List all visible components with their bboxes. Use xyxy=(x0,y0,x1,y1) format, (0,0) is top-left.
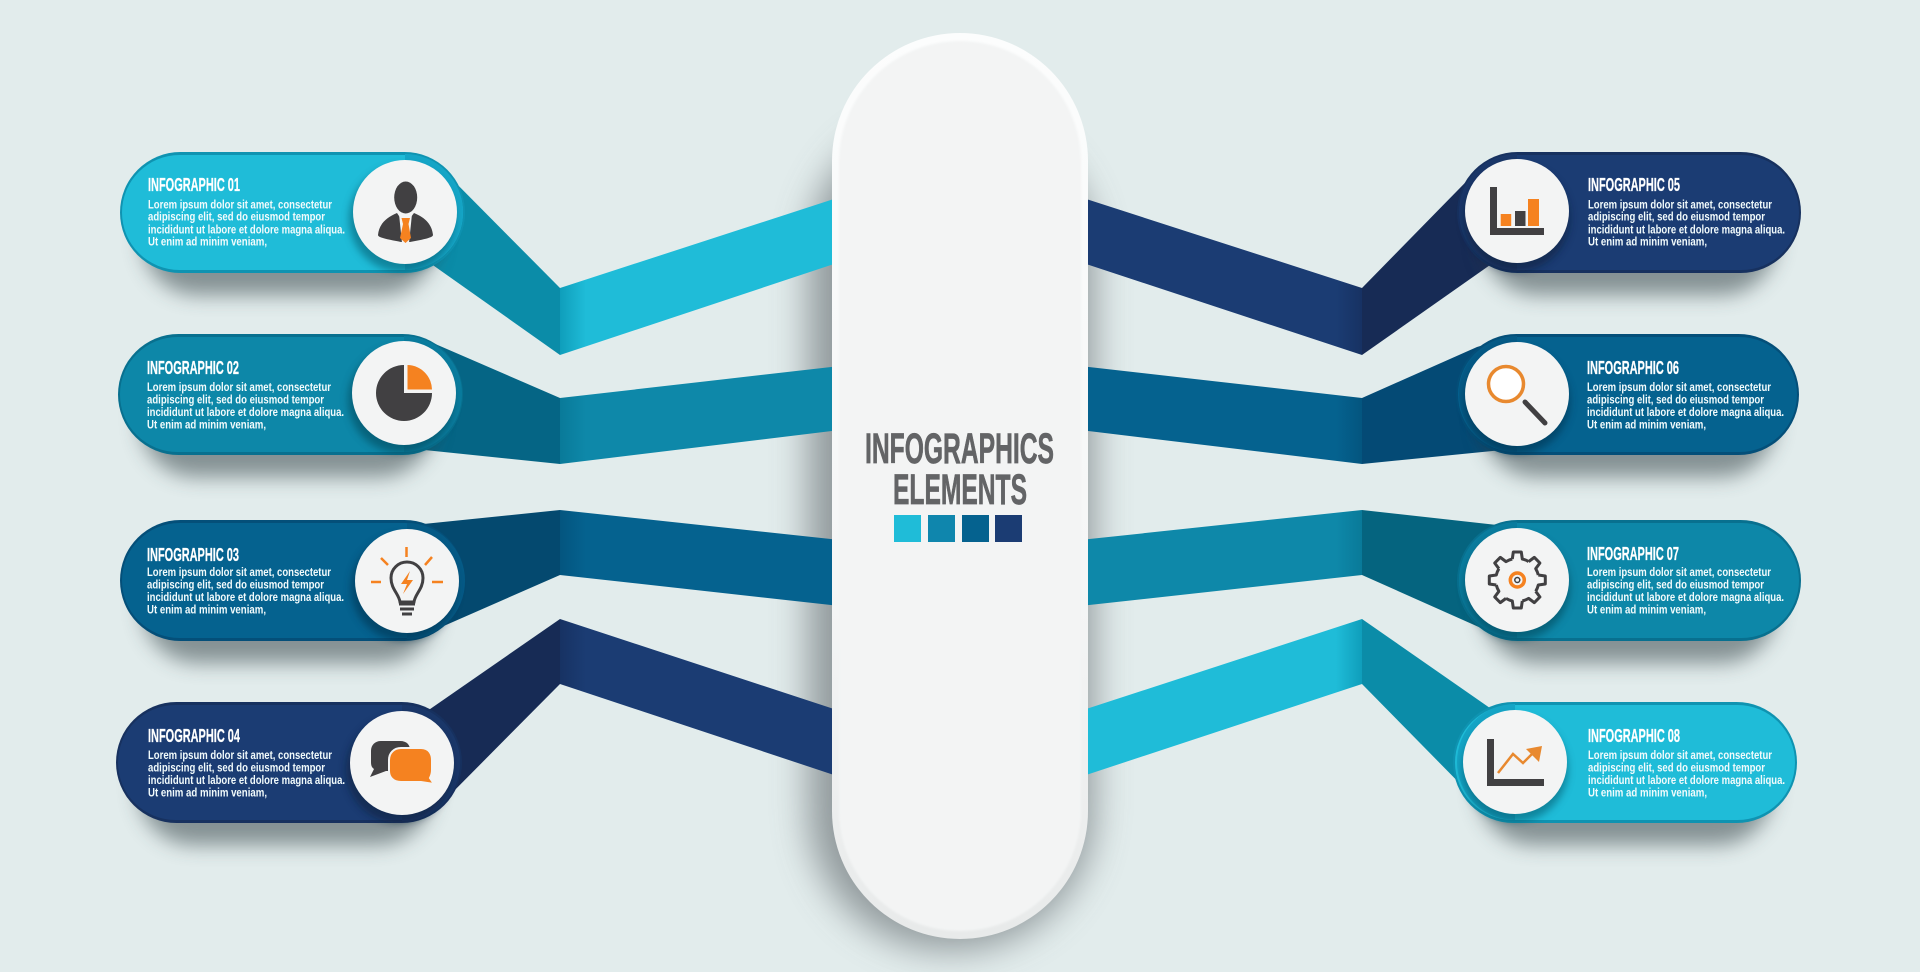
body text 05: Lorem ipsum dolor sit amet, consectetur xyxy=(1588,199,1772,211)
central title: INFOGRAPHICS xyxy=(865,426,1054,473)
body text 06: Lorem ipsum dolor sit amet, consectetur xyxy=(1587,382,1771,394)
body text 01: Ut enim ad minim veniam, xyxy=(148,237,267,249)
body text 04 xyxy=(148,750,345,800)
central title xyxy=(865,426,1054,514)
heading 07: INFOGRAPHIC 07 xyxy=(1587,544,1679,564)
icon: growth chart xyxy=(1487,739,1544,786)
body text 02 xyxy=(147,382,344,432)
body text 06: Ut enim ad minim veniam, xyxy=(1587,420,1706,432)
ribbon 08 xyxy=(1080,619,1515,802)
body text 07: Lorem ipsum dolor sit amet, consectetur xyxy=(1587,567,1771,579)
heading 02: INFOGRAPHIC 02 xyxy=(147,358,239,378)
ribbon 02 xyxy=(404,343,840,464)
heading 04: INFOGRAPHIC 04 xyxy=(148,726,240,746)
colour swatches xyxy=(894,515,1022,542)
panel: infographic 02 xyxy=(118,334,463,477)
icon: bar chart xyxy=(1490,187,1544,235)
body text 07: Ut enim ad minim veniam, xyxy=(1587,604,1706,616)
body text 06 xyxy=(1587,382,1784,432)
panel: infographic 01 xyxy=(120,152,465,295)
body text 05: incididunt ut labore et dolore magna aliqua. xyxy=(1588,224,1785,236)
panel: infographic 08 xyxy=(1453,702,1797,845)
panel: infographic 03 xyxy=(120,520,465,663)
heading 03: INFOGRAPHIC 03 xyxy=(147,545,239,565)
panel: infographic 07 xyxy=(1457,520,1801,663)
body text 08: adipiscing elit, sed do eiusmod tempor xyxy=(1588,762,1765,774)
heading 08: INFOGRAPHIC 08 xyxy=(1588,726,1680,746)
central pill shadow xyxy=(808,115,1094,950)
heading 05: INFOGRAPHIC 05 xyxy=(1588,175,1680,195)
body text 08: incididunt ut labore et dolore magna aliqua. xyxy=(1588,775,1785,787)
body text 01: adipiscing elit, sed do eiusmod tempor xyxy=(148,212,325,224)
central pill panel xyxy=(832,33,1088,939)
body text 04: adipiscing elit, sed do eiusmod tempor xyxy=(148,762,325,774)
icon: gear xyxy=(1489,552,1545,608)
body text 04: incididunt ut labore et dolore magna aliqua. xyxy=(148,775,345,787)
ribbon 07 xyxy=(1080,510,1517,632)
body text 03: incididunt ut labore et dolore magna aliqua. xyxy=(147,592,344,604)
body text 08: Ut enim ad minim veniam, xyxy=(1588,788,1707,800)
body text 07: incididunt ut labore et dolore magna aliqua. xyxy=(1587,592,1784,604)
ribbon 03 xyxy=(407,510,840,632)
icon: businessman xyxy=(378,182,433,243)
body text 06: adipiscing elit, sed do eiusmod tempor xyxy=(1587,394,1764,406)
body text 01: incididunt ut labore et dolore magna aliqua. xyxy=(148,224,345,236)
body text 08: Lorem ipsum dolor sit amet, consectetur xyxy=(1588,750,1772,762)
panel: infographic 05 xyxy=(1457,152,1801,295)
body text 07 xyxy=(1587,567,1784,616)
ribbon 06 xyxy=(1080,337,1517,464)
icon: magnifying glass xyxy=(1488,366,1545,423)
body text 04: Lorem ipsum dolor sit amet, consectetur xyxy=(148,750,332,762)
body text 03: adipiscing elit, sed do eiusmod tempor xyxy=(147,580,324,592)
body text 04: Ut enim ad minim veniam, xyxy=(148,788,267,800)
body text 07: adipiscing elit, sed do eiusmod tempor xyxy=(1587,580,1764,592)
body text 03 xyxy=(147,567,344,616)
central title: ELEMENTS xyxy=(893,467,1027,514)
body text 05 xyxy=(1588,199,1785,249)
ribbon 01 xyxy=(405,167,840,355)
icon: speech bubbles xyxy=(370,741,434,784)
body text 08 xyxy=(1588,750,1785,800)
body text 05: adipiscing elit, sed do eiusmod tempor xyxy=(1588,212,1765,224)
body text 01: Lorem ipsum dolor sit amet, consectetur xyxy=(148,199,332,211)
body text 03: Lorem ipsum dolor sit amet, consectetur xyxy=(147,567,331,579)
body text 03: Ut enim ad minim veniam, xyxy=(147,604,266,616)
body text 01 xyxy=(148,199,345,249)
body text 02: adipiscing elit, sed do eiusmod tempor xyxy=(147,394,324,406)
heading 06: INFOGRAPHIC 06 xyxy=(1587,358,1679,378)
icon: light bulb xyxy=(371,547,443,614)
body text 02: Lorem ipsum dolor sit amet, consectetur xyxy=(147,382,331,394)
body text 06: incididunt ut labore et dolore magna aliqua. xyxy=(1587,407,1784,419)
body text 05: Ut enim ad minim veniam, xyxy=(1588,237,1707,249)
icon: pie chart xyxy=(376,365,432,421)
body text 02: Ut enim ad minim veniam, xyxy=(147,420,266,432)
body text 02: incididunt ut labore et dolore magna aliqua. xyxy=(147,407,344,419)
panel: infographic 04 xyxy=(116,702,462,845)
panel: infographic 06 xyxy=(1456,334,1799,477)
heading 01: INFOGRAPHIC 01 xyxy=(148,175,240,195)
ribbon 05 xyxy=(1080,168,1517,355)
ribbon 04 xyxy=(402,619,840,805)
